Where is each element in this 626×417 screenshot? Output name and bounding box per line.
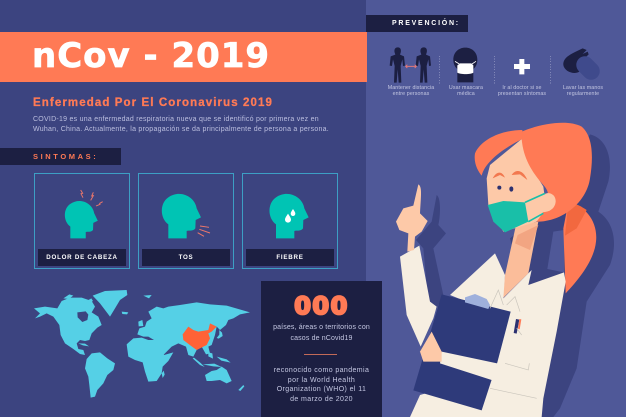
icon: head with pain [64, 190, 103, 238]
label: tos: TOS [179, 254, 193, 261]
pen pocket [514, 319, 519, 334]
prevention caption 3: presentan síntomas [498, 91, 546, 97]
illustration: doctor woman with mask and clipboard [396, 122, 614, 417]
big number: 000 [294, 292, 349, 320]
eyebrows and eyes [493, 171, 527, 180]
sintomas label: SINTOMAS: [33, 152, 98, 161]
right background panel [366, 0, 626, 417]
neck [503, 222, 538, 298]
symptom card: dolor de cabeza [34, 173, 130, 269]
pandemic text: reconocido como pandemia [274, 367, 369, 374]
prevention caption 3: Ir al doctor si se [502, 85, 542, 91]
label: dolor de cabeza: DOLOR DE CABEZA [46, 254, 118, 261]
americas and greenland [34, 290, 127, 398]
icon: medical cross [514, 59, 530, 74]
ear [540, 193, 556, 212]
cases text: casos de nCovid19 [290, 334, 353, 342]
pandemic text: de marzo de 2020 [290, 396, 353, 402]
prevention label: PREVENCIÓN: [392, 20, 460, 27]
back hair [522, 123, 592, 222]
prevention caption 2: médica [457, 91, 475, 97]
cases text [273, 324, 370, 342]
label: dolor de cabeza [38, 249, 126, 266]
prevention caption 2 [449, 85, 483, 97]
icon: mask [453, 48, 477, 82]
prevention caption 4 [563, 85, 603, 97]
sintomas heading [0, 148, 121, 165]
subtitle: Enfermedad Por El Coronavirus 2019 [33, 97, 273, 109]
separator [304, 354, 337, 355]
icon: two people with distance [390, 47, 431, 83]
prevention icons [390, 47, 600, 84]
prevention caption 2: Usar mascara [449, 85, 483, 91]
prevention caption 4: regularmente [567, 91, 599, 97]
icon: washing hands [563, 48, 603, 83]
symptom card: tos [138, 173, 234, 269]
face [487, 139, 547, 232]
gap in shadow [547, 230, 564, 272]
intro text: Wuhan, China. Actualmente, la propagación se da principalmente de persona a persona. [33, 126, 329, 133]
clip [465, 294, 490, 309]
intro text [33, 116, 329, 133]
prevention caption 1 [388, 85, 434, 97]
world map [34, 290, 250, 398]
statistics panel [261, 281, 382, 417]
pandemic text [274, 366, 369, 402]
label: tos [142, 249, 230, 266]
pandemic text: Organization (WHO) el 11 [277, 386, 366, 393]
label: fiebre: FIEBRE [276, 254, 304, 261]
icon: head coughing [162, 194, 210, 238]
title banner [0, 32, 367, 82]
prevention caption 3 [498, 85, 546, 97]
label: fiebre [246, 249, 334, 266]
prevention caption 1: entre personas [393, 91, 429, 97]
ponytail [563, 202, 596, 293]
shadow [416, 134, 614, 417]
africa, eurasia, oceania [122, 295, 250, 391]
symptom card: fiebre [242, 173, 338, 269]
forearm [440, 352, 542, 398]
prevention caption 4: Lavar las manos [563, 85, 603, 91]
coat fold lines [490, 290, 537, 398]
coat [410, 253, 566, 417]
clipboard [413, 294, 511, 410]
intro text: COVID-19 es una enfermedad respiratoria nueva que se identificó por primera vez en [33, 116, 319, 123]
icon: head with sweat drops [270, 194, 309, 238]
dotted dividers [439, 56, 550, 84]
bangs [475, 130, 522, 176]
lower hand [420, 332, 442, 362]
raised hand [396, 184, 428, 252]
prevention caption 1: Mantener distancia [388, 85, 434, 91]
raised arm sleeve [400, 246, 437, 347]
prevention heading [366, 15, 468, 32]
icon: distance arrow [406, 65, 416, 68]
mask [488, 201, 528, 232]
hudson bay [77, 311, 88, 322]
china highlighted [183, 323, 217, 350]
pandemic text: por la World Health [288, 376, 355, 384]
title: nCov - 2019 [32, 36, 270, 76]
cases text: países, áreas o territorios con [273, 324, 370, 331]
